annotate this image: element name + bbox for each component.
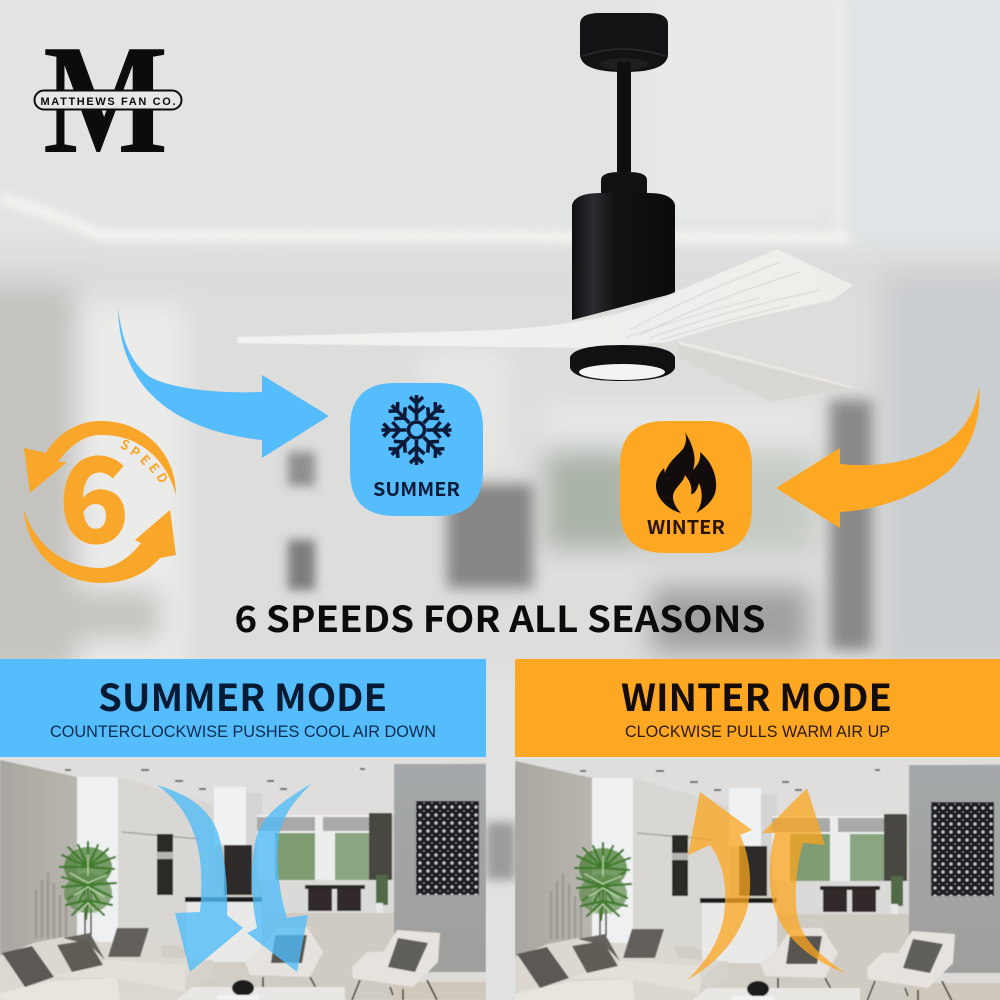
panel: winter mode	[515, 659, 1000, 1000]
winter header band	[515, 659, 1000, 757]
icon: winter badge	[620, 421, 752, 553]
panel: summer mode	[0, 659, 486, 1000]
speed curved label: D	[152, 469, 173, 486]
upper cycle arrow	[24, 421, 176, 495]
speed curved label: E	[136, 450, 155, 469]
logo: Matthews Fan Co.: M	[43, 12, 168, 186]
logo: Matthews Fan Co.: MATTHEWS FAN CO.	[40, 96, 176, 108]
main title: 6 SPEEDS FOR ALL SEASONS	[234, 591, 766, 643]
summer subheading: COUNTERCLOCKWISE PUSHES COOL AIR DOWN	[50, 723, 436, 741]
lower cycle arrow	[24, 510, 176, 583]
fan mount canopy	[580, 13, 668, 72]
fan collar	[601, 172, 647, 196]
summer heading: SUMMER MODE	[98, 668, 387, 722]
icon: summer badge	[350, 383, 483, 516]
speed curved label: P	[127, 441, 145, 462]
winter subheading: CLOCKWISE PULLS WARM AIR UP	[625, 723, 890, 741]
fan blades	[237, 249, 855, 402]
summer room photo	[0, 760, 486, 1000]
fan light housing	[570, 345, 675, 381]
summer label: SUMMER	[373, 475, 460, 502]
fan light	[579, 364, 665, 380]
speed curved label: S	[118, 434, 133, 454]
fan motor housing	[572, 193, 675, 320]
icon: snowflake	[382, 395, 452, 465]
speed curved label: E	[145, 458, 165, 476]
winter room photo	[515, 760, 1000, 1000]
arrow: orange curved arrow to winter	[776, 386, 979, 528]
fan downrod	[617, 62, 631, 172]
summer header band	[0, 659, 486, 757]
summer air arrows	[157, 783, 312, 972]
speed curved label	[118, 434, 173, 486]
icon: flame	[656, 432, 716, 513]
winter label: WINTER	[647, 513, 725, 540]
icon: 6 speed cycle	[24, 406, 176, 583]
winter heading: WINTER MODE	[621, 668, 892, 722]
winter air arrows	[687, 788, 845, 980]
ceiling fan	[237, 13, 855, 402]
big numeral 6: 6	[58, 406, 130, 577]
arrow: blue curved arrow to summer	[118, 308, 329, 458]
